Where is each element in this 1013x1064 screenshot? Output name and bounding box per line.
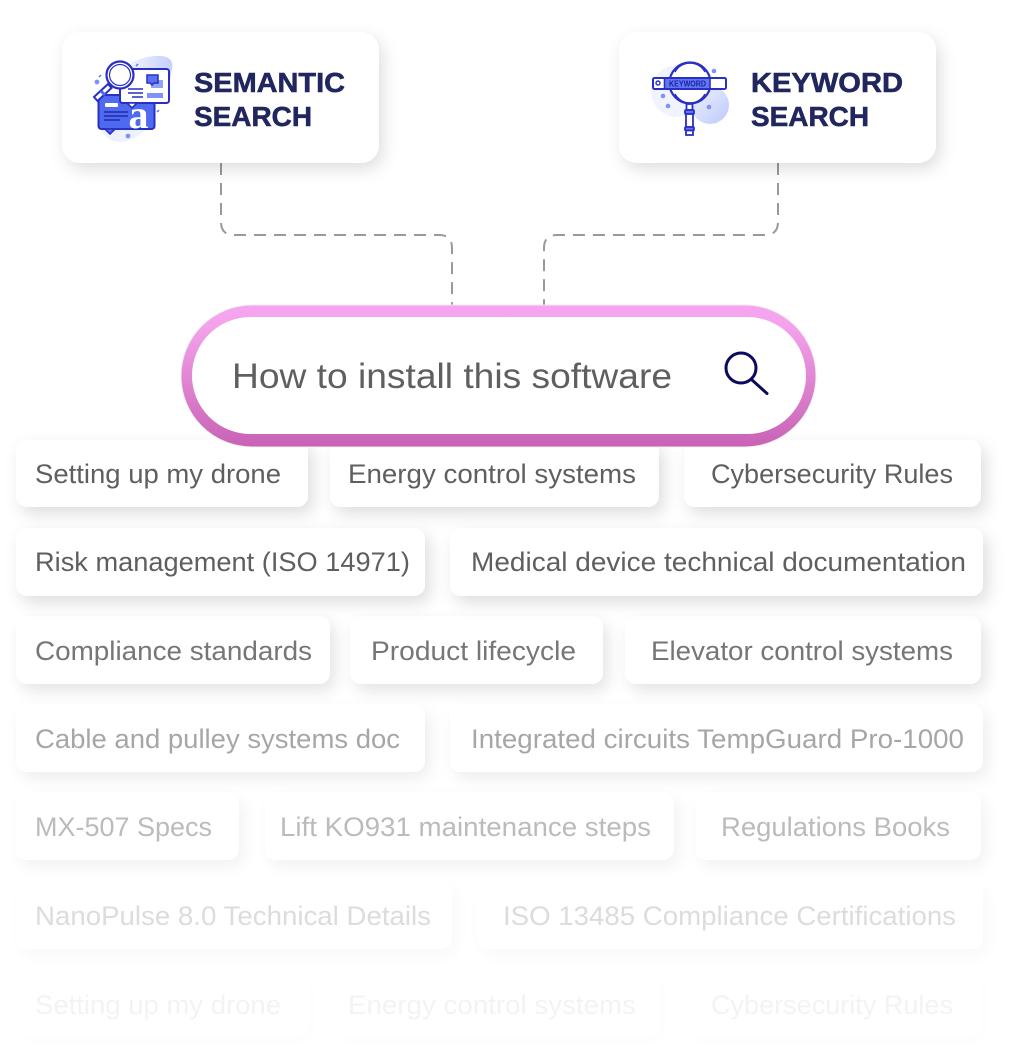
- chip: MX-507 Specs: [16, 792, 239, 860]
- result row 4: [16, 704, 983, 772]
- label: semantic search: [194, 67, 345, 132]
- label: keyword search: [751, 67, 903, 132]
- chip: Elevator control systems: [625, 616, 981, 684]
- chip: Risk management (ISO 14971): [16, 528, 425, 596]
- chip: Cable and pulley systems doc: Cable and pulley systems doc: [35, 724, 400, 754]
- chip: Lift KO931 maintenance steps: [265, 792, 674, 860]
- chip: Product lifecycle: Product lifecycle: [371, 636, 576, 666]
- chip: Regulations Books: Regulations Books: [721, 812, 950, 842]
- chip: Compliance standards: Compliance standards: [35, 636, 312, 666]
- search bar: [181, 305, 816, 447]
- card: keyword search: [619, 32, 936, 163]
- chip: Medical device technical documentation: [450, 528, 983, 596]
- icon: magnifier: [726, 353, 767, 394]
- chip: Energy control systems: [330, 440, 659, 507]
- chip: Medical device technical documentation: Medical device technical documentation: [471, 547, 966, 577]
- search query text: How to install this software: [232, 356, 672, 396]
- chip: Cybersecurity Rules: Cybersecurity Rules: [711, 459, 953, 489]
- result row 1: [16, 440, 981, 507]
- chip: Energy control systems: Energy control systems: [348, 990, 636, 1020]
- chip: Regulations Books: [696, 792, 981, 860]
- chip: Setting up my drone: [16, 970, 308, 1036]
- chip: Energy control systems: [330, 970, 659, 1036]
- result row 2: [16, 528, 983, 596]
- chip: NanoPulse 8.0 Technical Details: NanoPulse 8.0 Technical Details: [35, 901, 431, 931]
- chip: Setting up my drone: [16, 440, 308, 507]
- connector: semantic search to search bar: [221, 163, 452, 305]
- connector: keyword search to search bar: [544, 163, 778, 305]
- chip: Elevator control systems: Elevator control systems: [651, 636, 953, 666]
- chip: ISO 13485 Compliance Certifications: [477, 881, 983, 949]
- chip: Compliance standards: [16, 616, 330, 684]
- chip: Setting up my drone: Setting up my drone: [35, 459, 281, 489]
- chip: Lift KO931 maintenance steps: Lift KO931 maintenance steps: [280, 812, 651, 842]
- icon: semantic search: a: [128, 92, 148, 137]
- icon: keyword search: [651, 62, 729, 135]
- result row 5: [16, 792, 981, 860]
- chip: Integrated circuits TempGuard Pro-1000: [450, 704, 983, 772]
- chip: ISO 13485 Compliance Certifications: ISO 13485 Compliance Certifications: [503, 901, 956, 931]
- chip: Energy control systems: Energy control systems: [348, 459, 636, 489]
- chip: Cybersecurity Rules: [684, 970, 981, 1036]
- label: keyword search: KEYWORD: [751, 67, 903, 98]
- label: semantic search: SEARCH: [194, 101, 312, 132]
- chip: Cybersecurity Rules: Cybersecurity Rules: [711, 990, 953, 1020]
- label: keyword search: SEARCH: [751, 101, 869, 132]
- label: semantic search: SEMANTIC: [194, 67, 345, 98]
- chip: Cybersecurity Rules: [684, 440, 981, 507]
- icon: keyword search: KEYWORD: [669, 80, 706, 88]
- result row 7: [16, 970, 981, 1036]
- chip: Setting up my drone: Setting up my drone: [35, 990, 281, 1020]
- result row 6: [16, 881, 983, 949]
- chip: NanoPulse 8.0 Technical Details: [16, 881, 452, 949]
- icon: semantic search: [94, 56, 172, 142]
- card: semantic search: [62, 32, 379, 163]
- chip: Cable and pulley systems doc: [16, 704, 425, 772]
- result row 3: [16, 616, 981, 684]
- chip: Product lifecycle: [350, 616, 603, 684]
- chip: MX-507 Specs: MX-507 Specs: [35, 812, 212, 842]
- chip: Risk management (ISO 14971): Risk management (ISO 14971): [35, 547, 410, 577]
- chip: Integrated circuits TempGuard Pro-1000: Integrated circuits TempGuard Pro-1000: [471, 724, 964, 754]
